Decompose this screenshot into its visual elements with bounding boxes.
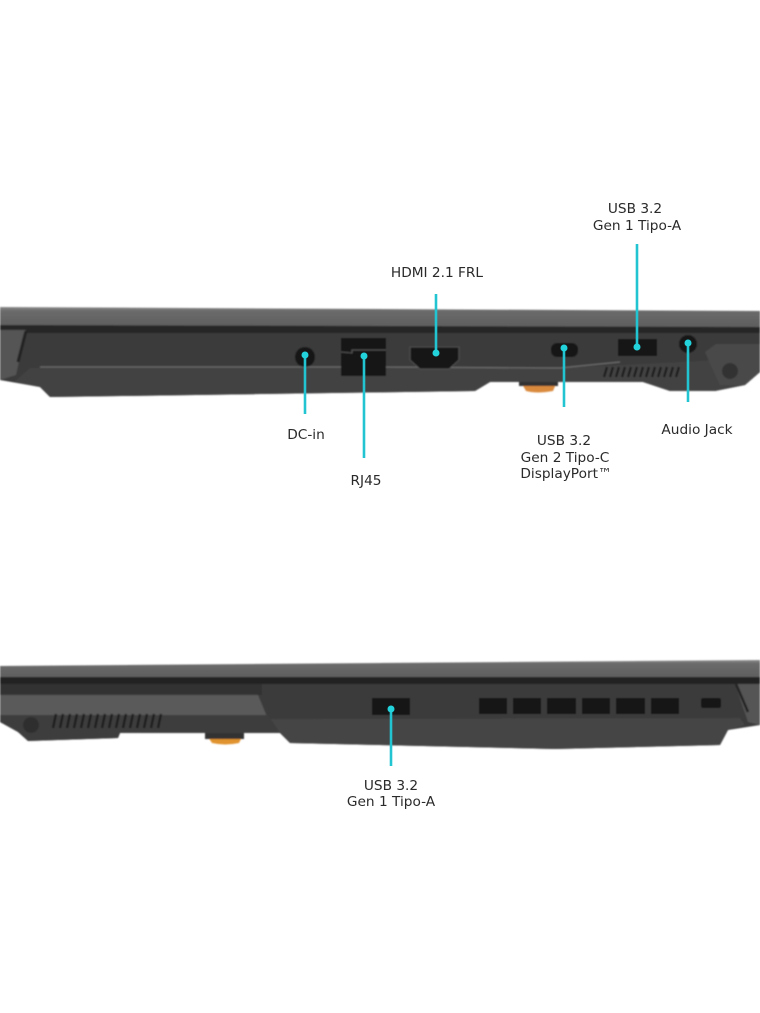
left body edge — [0, 330, 26, 380]
USB-C port — [551, 343, 578, 357]
label: Audio Jack: Audio Jack — [661, 422, 733, 438]
label: USB-C: DisplayPort™ — [520, 466, 612, 482]
lid — [0, 307, 760, 327]
laptop body — [0, 325, 760, 397]
highlight line — [40, 362, 620, 368]
RJ45 port — [341, 338, 386, 376]
round button — [722, 363, 738, 379]
label: HDMI: HDMI 2.1 FRL — [391, 265, 483, 281]
label: USB 3.2 Gen 1 Tipo-A bottom: Gen 1 Tipo-A — [347, 794, 436, 810]
audio jack — [679, 335, 697, 353]
lock slot — [701, 698, 721, 708]
dark band under hinge — [0, 684, 262, 695]
laptop body — [0, 677, 760, 749]
orange foot — [522, 384, 556, 392]
DC-in port — [295, 347, 315, 367]
right edge — [735, 684, 760, 725]
label: USB 3.2 Gen 1 Tipo-A top: USB 3.2 — [608, 201, 662, 217]
angled light panel — [0, 695, 268, 719]
foot mount — [205, 730, 244, 739]
exhaust vents — [479, 698, 679, 714]
hinge shadow — [0, 677, 760, 684]
lid — [0, 660, 760, 678]
callout line: left side — [388, 706, 394, 766]
vent grille — [604, 367, 679, 377]
label: DC-in: DC-in — [287, 427, 325, 443]
orange foot — [208, 737, 242, 744]
USB-A port — [618, 339, 657, 356]
USB-A port — [372, 698, 410, 715]
round button — [23, 717, 39, 733]
laptop: left side view — [0, 660, 760, 749]
body lower strip — [268, 718, 745, 749]
label: USB 3.2 Gen 1 Tipo-A top: Gen 1 Tipo-A — [593, 218, 682, 234]
vent grille — [53, 714, 161, 728]
label: RJ45: RJ45 — [351, 473, 381, 489]
lower left strip — [0, 715, 280, 741]
label: USB-C: USB 3.2 — [537, 433, 591, 449]
side panel slant — [705, 344, 760, 385]
label: USB-C: Gen 2 Tipo-C — [521, 450, 609, 466]
lower body strip — [14, 358, 760, 397]
label: USB 3.2 Gen 1 Tipo-A bottom: USB 3.2 — [364, 778, 418, 794]
callout lines: right side — [302, 244, 692, 458]
hinge shadow — [0, 325, 760, 333]
HDMI port — [410, 347, 459, 369]
foot mount — [519, 378, 558, 386]
laptop: right side view — [0, 307, 760, 397]
